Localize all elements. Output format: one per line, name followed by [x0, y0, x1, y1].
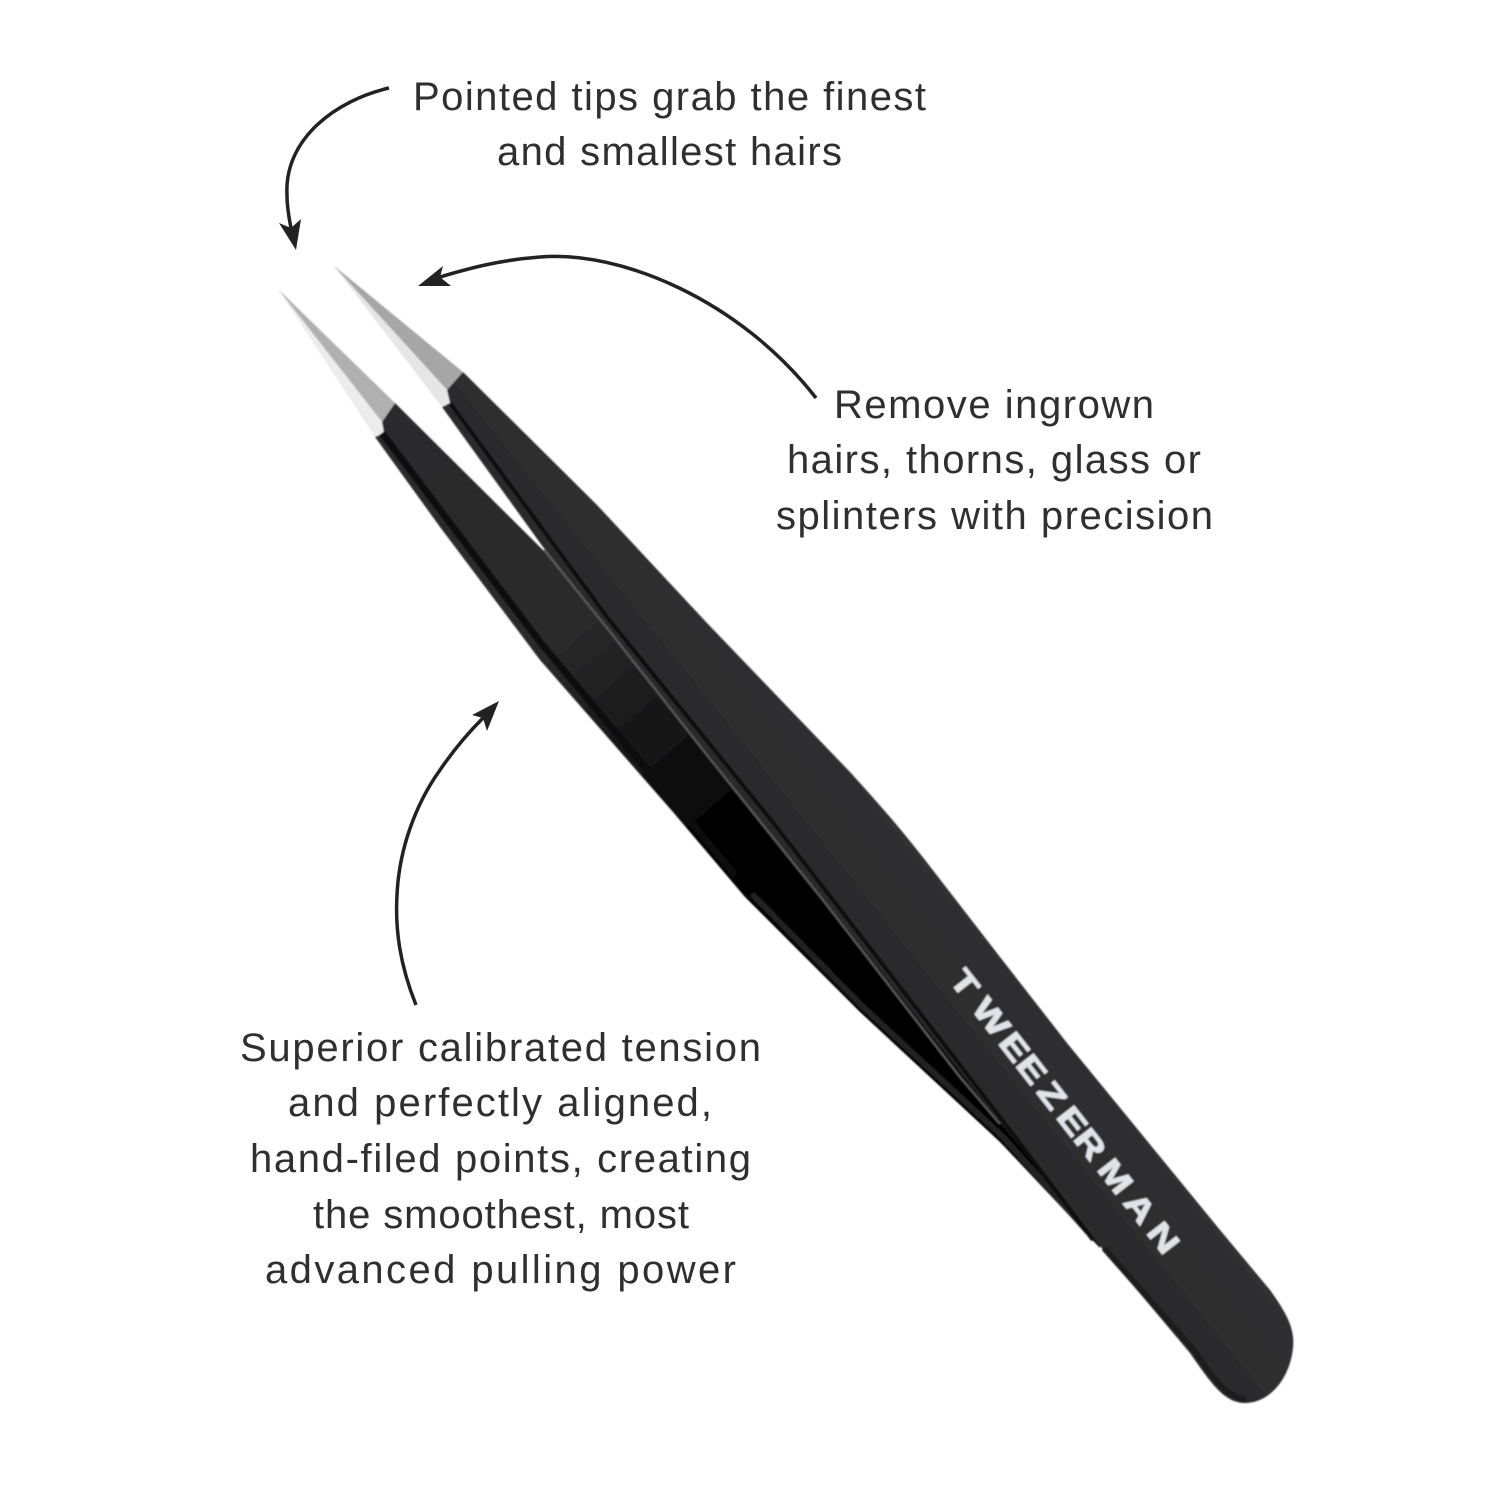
- text: pointed tips: [413, 75, 926, 174]
- back arm tip: [333, 265, 463, 407]
- back arm and handle: [442, 372, 1293, 1403]
- text: calibrated tension: the smoothest, most: [313, 1193, 689, 1237]
- text: calibrated tension: Superior calibrated tension: [240, 1026, 761, 1070]
- tweezers: [278, 265, 1293, 1403]
- front arm: [375, 403, 1100, 1248]
- text: calibrated tension: advanced pulling power: [265, 1248, 736, 1292]
- text: remove ingrown: hairs, thorns, glass or: [787, 438, 1201, 482]
- arrow: to arms: [397, 701, 499, 1005]
- text: remove ingrown: splinters with precision: [776, 494, 1213, 538]
- arrow: to tip side: [418, 256, 816, 398]
- text: remove ingrown: Remove ingrown: [834, 383, 1154, 427]
- text: pointed tips: and smallest hairs: [497, 130, 842, 174]
- arrow: to pointed tips: [279, 88, 389, 250]
- text: remove ingrown: [776, 383, 1213, 538]
- text: calibrated tension: and perfectly aligned,: [288, 1081, 712, 1125]
- front arm tip: [278, 289, 395, 437]
- text: calibrated tension: [240, 1026, 761, 1292]
- text: calibrated tension: hand-filed points, creating: [250, 1137, 751, 1181]
- brand logo: TWEEZERMAN: [943, 962, 1187, 1261]
- text: pointed tips: Pointed tips grab the finest: [413, 75, 926, 119]
